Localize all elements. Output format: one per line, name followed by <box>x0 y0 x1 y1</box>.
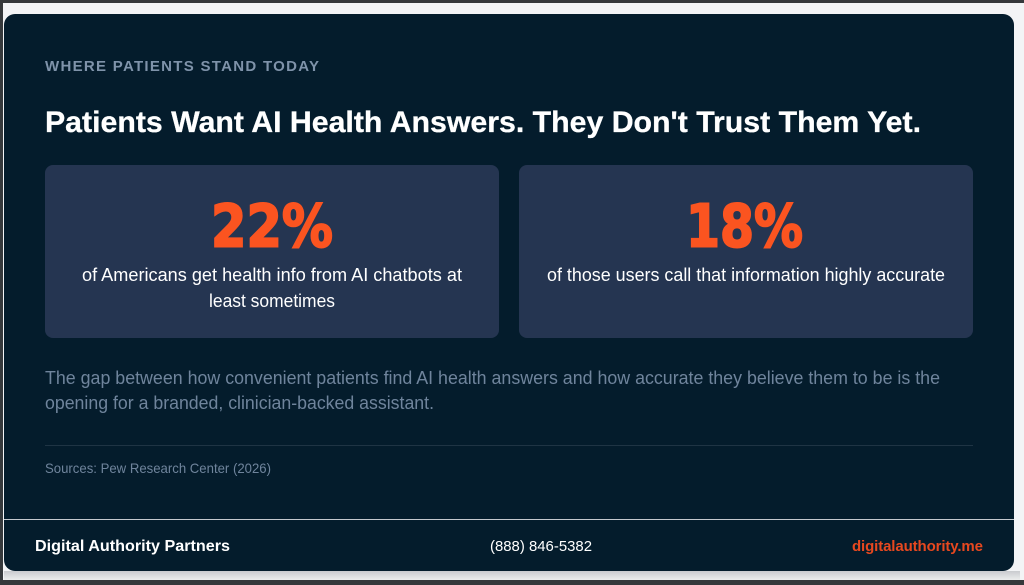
eyebrow label: WHERE PATIENTS STAND TODAY <box>45 58 319 75</box>
stat description: least sometimes <box>209 291 335 311</box>
panel: 22 percent stat <box>45 165 499 338</box>
stat description: of Americans get health info from AI chatbots at <box>82 265 462 285</box>
footer phone: (888) 846-5382 <box>490 538 592 555</box>
explanatory paragraph: The gap between how convenient patients find AI health answers and how accurate they believe them to be is the <box>45 368 940 388</box>
explanatory paragraph <box>45 368 940 413</box>
footer <box>35 538 983 555</box>
stat number 18%: 18% <box>686 192 803 260</box>
panel: 18 percent stat <box>519 165 973 338</box>
explanatory paragraph: opening for a branded, clinician-backed assistant. <box>45 393 434 413</box>
footer brand: Digital Authority Partners <box>35 538 230 555</box>
footer website: digitalauthority.me <box>852 538 983 555</box>
stat description <box>82 265 462 311</box>
stat number 22%: 22% <box>211 192 333 260</box>
stat description: of those users call that information highly accurate <box>547 265 945 285</box>
title: Patients Want AI Health Answers. They Don't Trust Them Yet. <box>45 106 921 139</box>
sources: Sources: Pew Research Center (2026) <box>45 460 271 476</box>
